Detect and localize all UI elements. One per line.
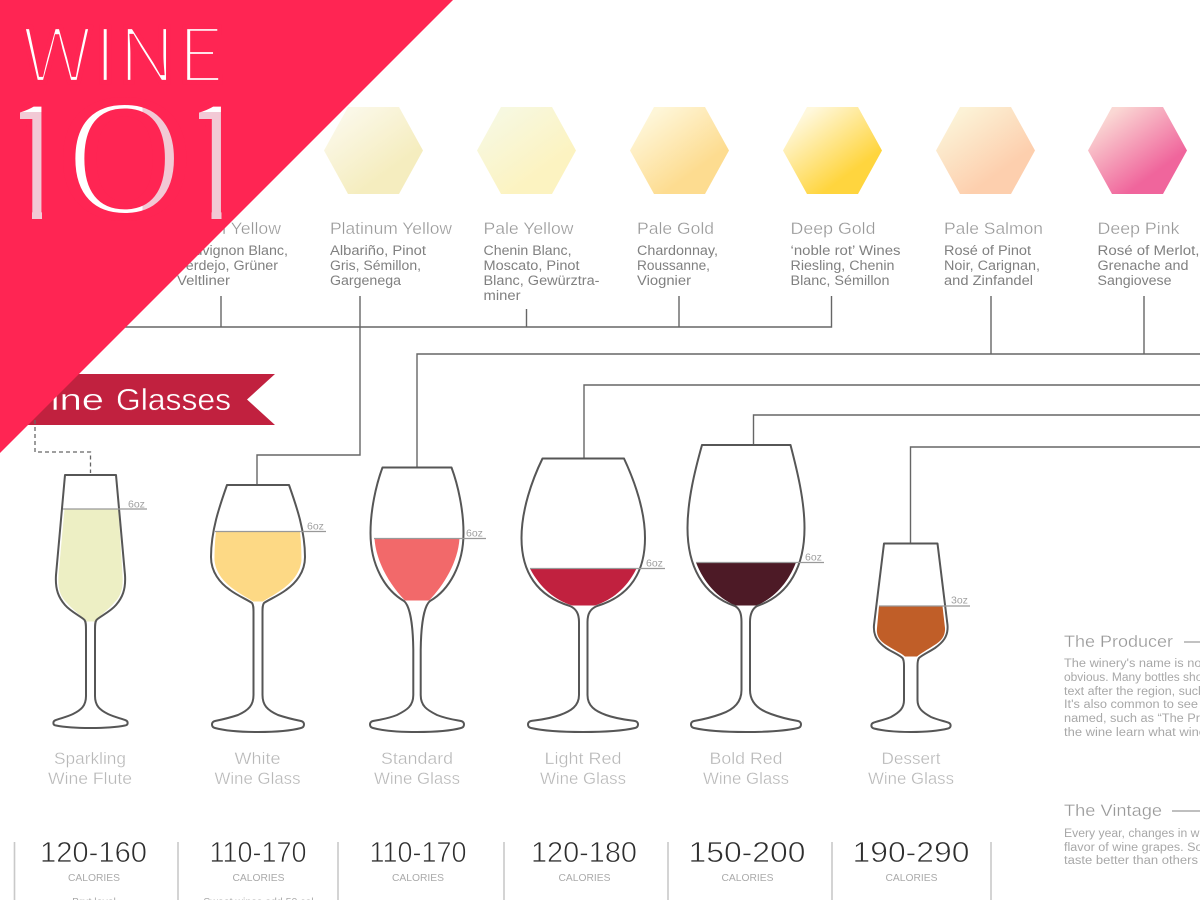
calories table: 120-160 <box>40 837 147 869</box>
glass: light red: 6oz <box>646 558 663 570</box>
glass: dessert: 3oz <box>951 594 968 606</box>
text: deep pink wines: Rosé of Merlot, <box>1098 243 1200 258</box>
text: platinum yellow wines: Albariño, Pinot <box>330 243 426 258</box>
text: green yellow wines: Sauvignon Blanc, <box>177 243 288 258</box>
section: the producer: The winery's name is not <box>1064 658 1200 670</box>
calories table: 190-290 <box>852 837 970 869</box>
glass: sparkling flute <box>53 475 147 728</box>
text: pale salmon wines: Pale Salmon <box>944 219 1043 238</box>
glass: standard <box>370 468 486 732</box>
text: green yellow wines: Veltliner <box>177 273 231 288</box>
title: wine 101: 1 <box>167 29 259 270</box>
icon: pale gold swatch <box>630 107 729 194</box>
glass names: Wine Flute <box>48 769 132 788</box>
text: pale gold wines: Roussanne, <box>637 258 710 273</box>
section: the producer: The Producer <box>1064 633 1174 651</box>
text: pale salmon wines <box>944 219 1043 288</box>
title: wine 101: 0 <box>57 33 192 260</box>
icon: pale salmon swatch <box>936 107 1035 194</box>
glass names: Wine Glass <box>214 769 300 788</box>
text: pale gold wines: Chardonnay, <box>637 243 718 258</box>
text: platinum yellow wines <box>330 219 453 288</box>
section: the vintage: taste better than others <box>1064 855 1198 867</box>
calories table: CALORIES <box>558 872 610 884</box>
banner: wine glasses: Wine <box>13 382 104 417</box>
icon: deep gold swatch <box>783 107 882 194</box>
text: deep pink wines <box>1098 219 1200 288</box>
text: platinum yellow wines: Platinum Yellow <box>330 219 453 238</box>
section: the vintage <box>1064 802 1200 867</box>
glass names: Wine Glass <box>540 769 626 788</box>
section: the producer: text after the region, such <box>1064 686 1200 698</box>
calories table: 110-170 <box>210 837 306 869</box>
text: deep pink wines: Deep Pink <box>1098 219 1180 238</box>
glass: bold red: 6oz <box>805 552 822 564</box>
glass names: Light Red <box>544 749 622 768</box>
icon: deep pink swatch <box>1088 107 1187 194</box>
glass names: Wine Glass <box>868 769 954 788</box>
text: deep pink wines: Grenache and <box>1098 258 1188 273</box>
text: green yellow wines: Verdejo, Grüner <box>177 258 279 273</box>
text: deep gold wines: ‘noble rot’ Wines <box>790 243 901 258</box>
text: pale gold wines <box>637 219 718 288</box>
glass: sparkling flute: 6oz <box>128 498 145 510</box>
section: the producer <box>1064 633 1200 739</box>
calories table: CALORIES <box>722 872 774 884</box>
text: pale salmon wines: Rosé of Pinot <box>944 243 1031 258</box>
calories table: 150-200 <box>688 837 806 869</box>
glass: standard: 6oz <box>466 528 483 540</box>
calories table <box>14 837 991 900</box>
glass names: Bold Red <box>710 749 782 768</box>
text: pale yellow wines: Blanc, Gewürztra- <box>484 273 600 288</box>
text: pale gold wines: Pale Gold <box>637 219 714 238</box>
glass names: Wine Glass <box>374 769 460 788</box>
icon: pale yellow swatch <box>477 107 576 194</box>
calories table: CALORIES <box>232 872 284 884</box>
glass: white wine: 6oz <box>307 520 324 532</box>
glass names: Dessert <box>882 749 941 768</box>
glass names: Sparkling <box>54 749 126 768</box>
glass: bold red <box>688 445 824 732</box>
section: the vintage: The Vintage <box>1064 802 1162 820</box>
calories table: CALORIES <box>68 872 120 884</box>
text: platinum yellow wines: Gargenega <box>330 273 402 288</box>
text: pale yellow wines: Moscato, Pinot <box>484 258 580 273</box>
text: pale salmon wines: and Zinfandel <box>944 273 1033 288</box>
glass names: Wine Glass <box>703 769 789 788</box>
banner: wine glasses <box>13 374 275 425</box>
title corner triangle <box>0 0 453 453</box>
text: platinum yellow wines: Gris, Sémillon, <box>330 258 421 273</box>
glass names <box>48 749 954 788</box>
glass: white wine <box>211 485 326 732</box>
calories table: CALORIES <box>392 872 444 884</box>
connector lines: wine colours to glasses <box>90 296 1200 543</box>
glass: dessert <box>871 544 970 732</box>
icon: platinum yellow swatch <box>324 107 423 194</box>
text: pale salmon wines: Noir, Carignan, <box>944 258 1040 273</box>
text: green yellow wines: Green Yellow <box>177 219 282 238</box>
text: pale yellow wines: Pale Yellow <box>484 219 574 238</box>
glass names: Standard <box>381 749 453 768</box>
dashed connector to flute <box>35 420 90 473</box>
text: deep gold wines: Riesling, Chenin <box>790 258 894 273</box>
calories table: 120-180 <box>531 837 637 869</box>
section: the producer: the wine learn what wine <box>1064 727 1200 739</box>
calories table: CALORIES <box>886 872 938 884</box>
text: pale yellow wines <box>484 219 600 303</box>
text: deep gold wines <box>790 219 901 288</box>
title: wine 101 <box>20 29 222 219</box>
text: green yellow wines <box>177 219 288 288</box>
section: the producer: It's also common to see <box>1064 699 1198 711</box>
text: deep gold wines: Blanc, Sémillon <box>790 273 890 288</box>
calories table: 110-170 <box>370 837 466 869</box>
text: pale yellow wines: miner <box>484 288 521 303</box>
banner: wine glasses: Glasses <box>116 382 231 417</box>
glass: light red <box>522 458 665 732</box>
text: pale yellow wines: Chenin Blanc, <box>484 243 572 258</box>
text: pale gold wines: Viognier <box>637 273 692 288</box>
text: deep pink wines: Sangiovese <box>1098 273 1172 288</box>
text: deep gold wines: Deep Gold <box>790 219 876 238</box>
glass names: White <box>234 749 280 768</box>
